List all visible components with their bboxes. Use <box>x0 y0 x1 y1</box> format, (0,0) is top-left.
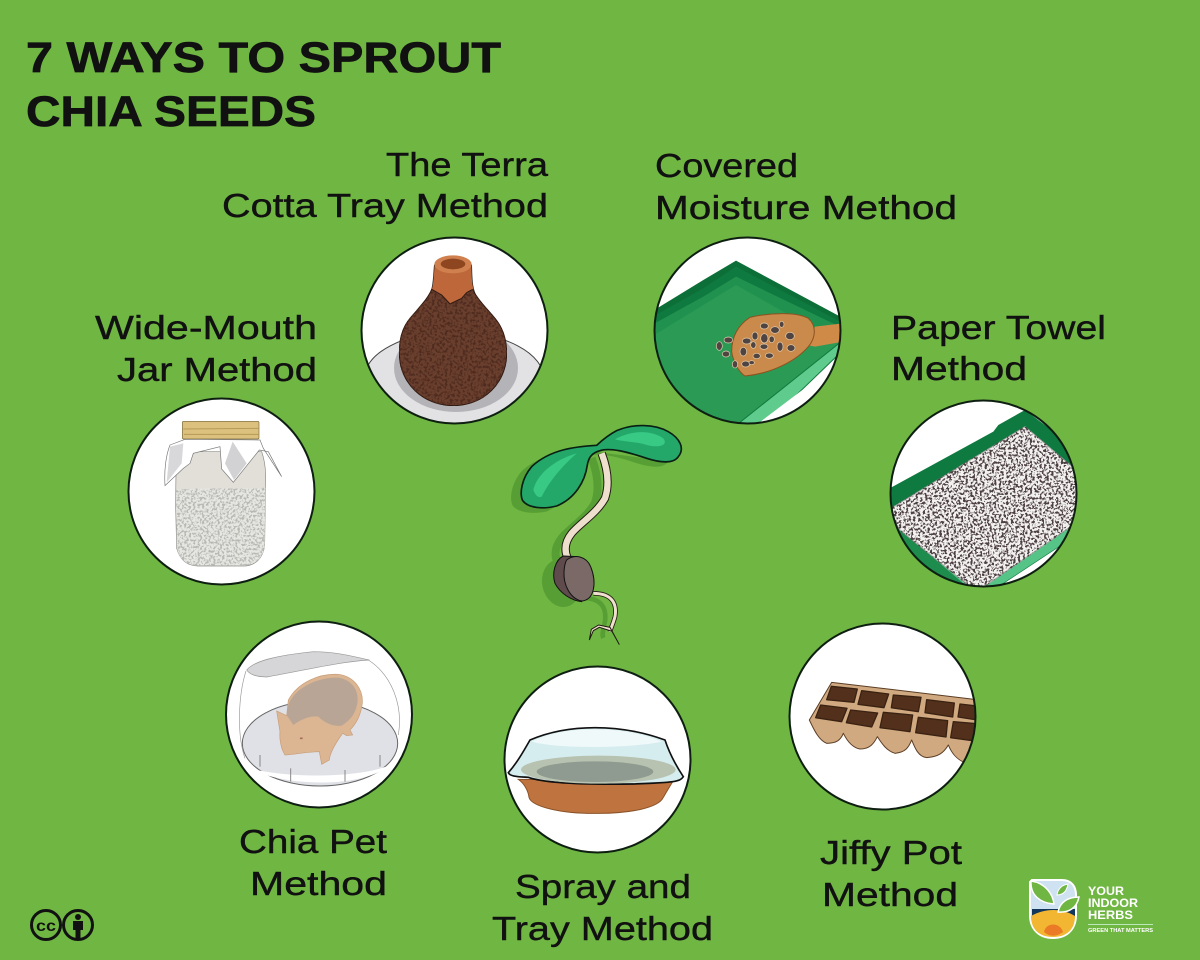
label: paper towel method: Method <box>891 350 1027 387</box>
icon: chia pet animal <box>277 674 362 764</box>
label: wide-mouth jar method: Wide-Mouth <box>95 309 317 346</box>
icon: glass dome <box>239 652 399 786</box>
label: spray and tray method: Spray and <box>515 868 691 905</box>
icon: creative commons CC BY: cc <box>36 918 56 935</box>
icon: terra cotta pot <box>399 255 507 406</box>
panel: spray and tray <box>504 666 690 852</box>
label: covered moisture method: Covered <box>655 147 798 184</box>
label: chia pet method: Method <box>250 865 387 902</box>
label: terra cotta tray method <box>222 146 549 224</box>
logo wordmark <box>1088 884 1153 934</box>
label: jiffy pot method: Method <box>822 876 958 913</box>
icon: clear dome lid <box>508 728 683 784</box>
icon: logo shield <box>1030 880 1079 938</box>
icon: paper towel with chia seeds <box>888 427 1080 588</box>
label: paper towel method: Paper Towel <box>891 309 1106 346</box>
label: spray and tray method: Tray Method <box>492 910 713 947</box>
icon: jar <box>165 421 282 566</box>
label: terra cotta tray method: The Terra <box>386 146 549 183</box>
label: chia pet method: Chia Pet <box>239 823 387 860</box>
logo wordmark: INDOOR <box>1088 896 1138 910</box>
logo wordmark: YOUR <box>1088 884 1124 898</box>
label: paper towel method <box>891 309 1106 387</box>
panel: covered moisture tray <box>652 238 847 430</box>
icon: creative commons CC BY <box>32 910 92 940</box>
icon: central chia sprout <box>511 426 681 645</box>
panel: chia pet <box>226 622 412 808</box>
label: terra cotta tray method: Cotta Tray Method <box>222 187 548 224</box>
title <box>26 34 501 136</box>
title: 7 WAYS TO SPROUT <box>26 34 501 82</box>
icon: wooden spoon with seeds <box>716 314 843 376</box>
label: chia pet method <box>239 823 387 902</box>
label: wide-mouth jar method: Jar Method <box>117 351 317 388</box>
label: covered moisture method: Moisture Method <box>655 189 957 226</box>
label: spray and tray method <box>492 868 713 947</box>
title: CHIA SEEDS <box>26 88 316 136</box>
icon: peat pot tray <box>809 682 980 765</box>
label: wide-mouth jar method <box>95 309 317 388</box>
panel: jiffy pot <box>790 624 980 810</box>
logo wordmark: GREEN THAT MATTERS <box>1088 928 1153 934</box>
panel: paper towel tray <box>887 400 1080 592</box>
label: covered moisture method <box>655 147 957 226</box>
panel: wide-mouth jar <box>128 398 314 584</box>
icon: green tray <box>652 261 847 430</box>
label: jiffy pot method <box>820 834 962 913</box>
logo: Your Indoor Herbs <box>1030 880 1153 938</box>
label: jiffy pot method: Jiffy Pot <box>820 834 962 871</box>
logo wordmark: HERBS <box>1088 908 1133 922</box>
panel: terra cotta tray <box>362 238 548 426</box>
icon: tray rim <box>892 410 1071 530</box>
icon: terracotta tray <box>518 779 673 813</box>
